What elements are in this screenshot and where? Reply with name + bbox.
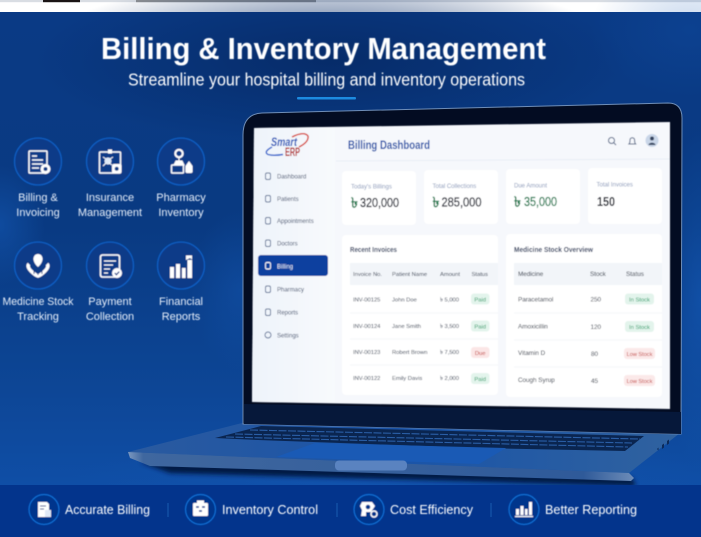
title: Billing & Inventory Management bbox=[101, 31, 546, 66]
benefit: Cost Efficiency: Cost Efficiency bbox=[390, 502, 473, 517]
panel: Recent Invoices bbox=[342, 235, 498, 395]
benefit: Inventory Control bbox=[186, 494, 318, 524]
panel: Medicine Stock Overview: Cough Syrup bbox=[518, 377, 555, 384]
panel: Recent Invoices: Emily Davis bbox=[392, 376, 422, 382]
nav: Patients bbox=[266, 196, 299, 203]
feature: Pharmacy Inventory bbox=[156, 138, 206, 219]
nav: Dashboard: Dashboard bbox=[277, 174, 306, 180]
laptop bbox=[128, 103, 682, 486]
nav: Doctors: Doctors bbox=[277, 242, 298, 248]
panel: Recent Invoices: INV-00122 bbox=[353, 376, 380, 382]
panel: Recent Invoices: ৳ 2,000 bbox=[440, 375, 459, 382]
panel: Recent Invoices: Recent Invoices bbox=[350, 247, 397, 254]
panel: Medicine Stock Overview: In Stock bbox=[629, 297, 650, 303]
stat card: Total Collections: ৳ bbox=[432, 194, 440, 210]
stat card: Total Collections: 285,000 bbox=[442, 194, 482, 210]
keyboard bbox=[215, 426, 644, 451]
nav: Settings bbox=[265, 332, 299, 340]
panel: Recent Invoices: Invoice No. bbox=[353, 272, 382, 278]
benefit: Accurate Billing bbox=[29, 494, 150, 524]
stat card: Due Amount: 35,000 bbox=[524, 194, 557, 209]
laptop shadow bbox=[140, 462, 636, 486]
nav: Reports: Reports bbox=[277, 311, 298, 317]
benefit: Inventory Control: Inventory Control bbox=[222, 502, 318, 517]
panel: Medicine Stock Overview: 250 bbox=[590, 296, 602, 304]
panel: Recent Invoices: Paid bbox=[474, 297, 486, 303]
nav: Patients: Patients bbox=[277, 197, 299, 203]
panel: Recent Invoices: Jane Smith bbox=[392, 324, 421, 330]
panel: Medicine Stock Overview: Vitamin D bbox=[518, 350, 546, 357]
nav: Billing active: Billing bbox=[277, 264, 293, 270]
feature: Medicine Stock Tracking: Tracking bbox=[17, 311, 59, 323]
benefit: Better Reporting: Better Reporting bbox=[545, 502, 637, 517]
feature icons bbox=[2, 138, 206, 323]
feature: Payment Collection: Payment bbox=[88, 296, 132, 308]
feature: Billing & Invoicing: Invoicing bbox=[16, 207, 60, 219]
panel: Recent Invoices: John Doe bbox=[392, 298, 417, 304]
sidebar bbox=[252, 127, 335, 403]
subtitle: Streamline your hospital billing and inventory operations bbox=[128, 70, 525, 90]
logo: Smart ERP: Smart bbox=[271, 135, 298, 149]
front edge bbox=[128, 452, 634, 481]
panel: Recent Invoices: INV-00123 bbox=[353, 350, 380, 356]
panel: Recent Invoices: Robert Brown bbox=[392, 350, 427, 356]
panel: Recent Invoices: Amount bbox=[440, 272, 460, 278]
benefit: Cost Efficiency bbox=[354, 494, 473, 524]
panel: Recent Invoices: Patient Name bbox=[392, 272, 427, 278]
feature: Insurance Management: Insurance bbox=[86, 192, 134, 204]
nav: Appointments bbox=[266, 218, 314, 225]
nav: Pharmacy: Pharmacy bbox=[277, 288, 304, 294]
feature: Insurance Management: Management bbox=[78, 207, 142, 219]
lid bezel bbox=[243, 103, 682, 434]
dashboard heading: Billing Dashboard bbox=[348, 140, 430, 152]
stat card: Total Collections: Total Collections bbox=[432, 184, 476, 190]
footer dividers bbox=[168, 503, 491, 517]
panel: Medicine Stock Overview: Amoxicillin bbox=[518, 324, 548, 330]
nav: Doctors bbox=[266, 240, 298, 248]
feature: Medicine Stock Tracking: Medicine Stock bbox=[2, 296, 74, 308]
feature: Financial Reports: Reports bbox=[162, 311, 201, 323]
panel: Recent Invoices: INV-00125 bbox=[353, 298, 380, 304]
panel: Medicine Stock Overview: Low Stock bbox=[627, 352, 653, 358]
stat card: Due Amount bbox=[506, 169, 580, 224]
panel: Medicine Stock Overview: In Stock bbox=[629, 325, 650, 331]
stat card: Total Invoices: 150 bbox=[597, 194, 615, 209]
panel: Medicine Stock Overview: Paracetamol bbox=[518, 296, 553, 304]
panel: Recent Invoices: Paid bbox=[474, 377, 486, 383]
stat card: Due Amount: ৳ bbox=[514, 194, 521, 210]
feature: Billing & Invoicing bbox=[14, 138, 62, 219]
panel: Recent Invoices: ৳ 7,500 bbox=[440, 349, 459, 356]
stat card: Today's Billings: Today's Billings bbox=[351, 184, 392, 190]
nav: Settings: Settings bbox=[277, 334, 299, 340]
panel: Medicine Stock Overview: Stock bbox=[590, 271, 607, 278]
feature: Payment Collection: Collection bbox=[86, 311, 134, 323]
feature: Medicine Stock Tracking bbox=[2, 242, 74, 323]
logo: Smart ERP bbox=[266, 134, 308, 159]
nav: Pharmacy bbox=[266, 286, 304, 294]
header icons bbox=[608, 134, 658, 147]
trackpad bbox=[276, 443, 506, 464]
notch bbox=[335, 460, 407, 470]
title underline bbox=[297, 97, 356, 100]
panel: Recent Invoices: Paid bbox=[474, 324, 486, 330]
stat card: Today's Billings: 320,000 bbox=[360, 195, 399, 210]
logo: Smart ERP: ERP bbox=[285, 145, 300, 159]
feature: Financial Reports bbox=[158, 242, 204, 323]
panel: Medicine Stock Overview: 80 bbox=[591, 351, 599, 358]
stat card: Due Amount: Due Amount bbox=[514, 184, 547, 190]
nav: Billing active bbox=[258, 255, 328, 276]
stat card: Total Invoices bbox=[588, 168, 662, 224]
screen bbox=[252, 122, 670, 409]
stat card: Total Invoices: Total Invoices bbox=[596, 182, 633, 188]
panel: Recent Invoices: Status bbox=[472, 272, 488, 278]
benefit: Accurate Billing: Accurate Billing bbox=[65, 502, 150, 517]
panel: Recent Invoices: ৳ 5,000 bbox=[440, 296, 459, 304]
panel: Medicine Stock Overview: Low Stock bbox=[627, 379, 653, 385]
panel: Medicine Stock Overview: Medicine Stock Overview bbox=[514, 247, 594, 254]
nav: Reports bbox=[266, 309, 298, 317]
feature: Insurance Management bbox=[78, 138, 142, 219]
feature: Financial Reports: Financial bbox=[159, 296, 203, 308]
panel: Medicine Stock Overview bbox=[506, 234, 662, 397]
feature: Billing & Invoicing: Billing & bbox=[18, 192, 59, 204]
ports bbox=[657, 440, 669, 450]
benefit: Better Reporting bbox=[509, 494, 637, 524]
feature: Pharmacy Inventory: Inventory bbox=[158, 207, 204, 219]
panel: Medicine Stock Overview: 120 bbox=[590, 324, 602, 331]
header divider bbox=[336, 159, 670, 161]
panel: Medicine Stock Overview: Medicine bbox=[518, 271, 544, 278]
nav: Appointments: Appointments bbox=[277, 219, 314, 225]
panel: Recent Invoices: Due bbox=[475, 351, 486, 357]
feature: Payment Collection bbox=[86, 242, 134, 323]
footer bar bbox=[0, 485, 701, 537]
stat card: Today's Billings bbox=[342, 171, 416, 225]
feature: Pharmacy Inventory: Pharmacy bbox=[156, 192, 206, 204]
panel: Medicine Stock Overview: Status bbox=[626, 271, 644, 278]
top image strip bbox=[0, 0, 701, 12]
stat card: Today's Billings: ৳ bbox=[351, 194, 358, 210]
laptop base bbox=[128, 423, 680, 473]
stat card: Total Collections bbox=[424, 170, 498, 224]
panel: Recent Invoices: INV-00124 bbox=[353, 324, 381, 330]
nav: Dashboard bbox=[266, 173, 306, 180]
panel: Medicine Stock Overview: 45 bbox=[591, 378, 599, 385]
panel: Recent Invoices: ৳ 3,500 bbox=[440, 323, 459, 330]
